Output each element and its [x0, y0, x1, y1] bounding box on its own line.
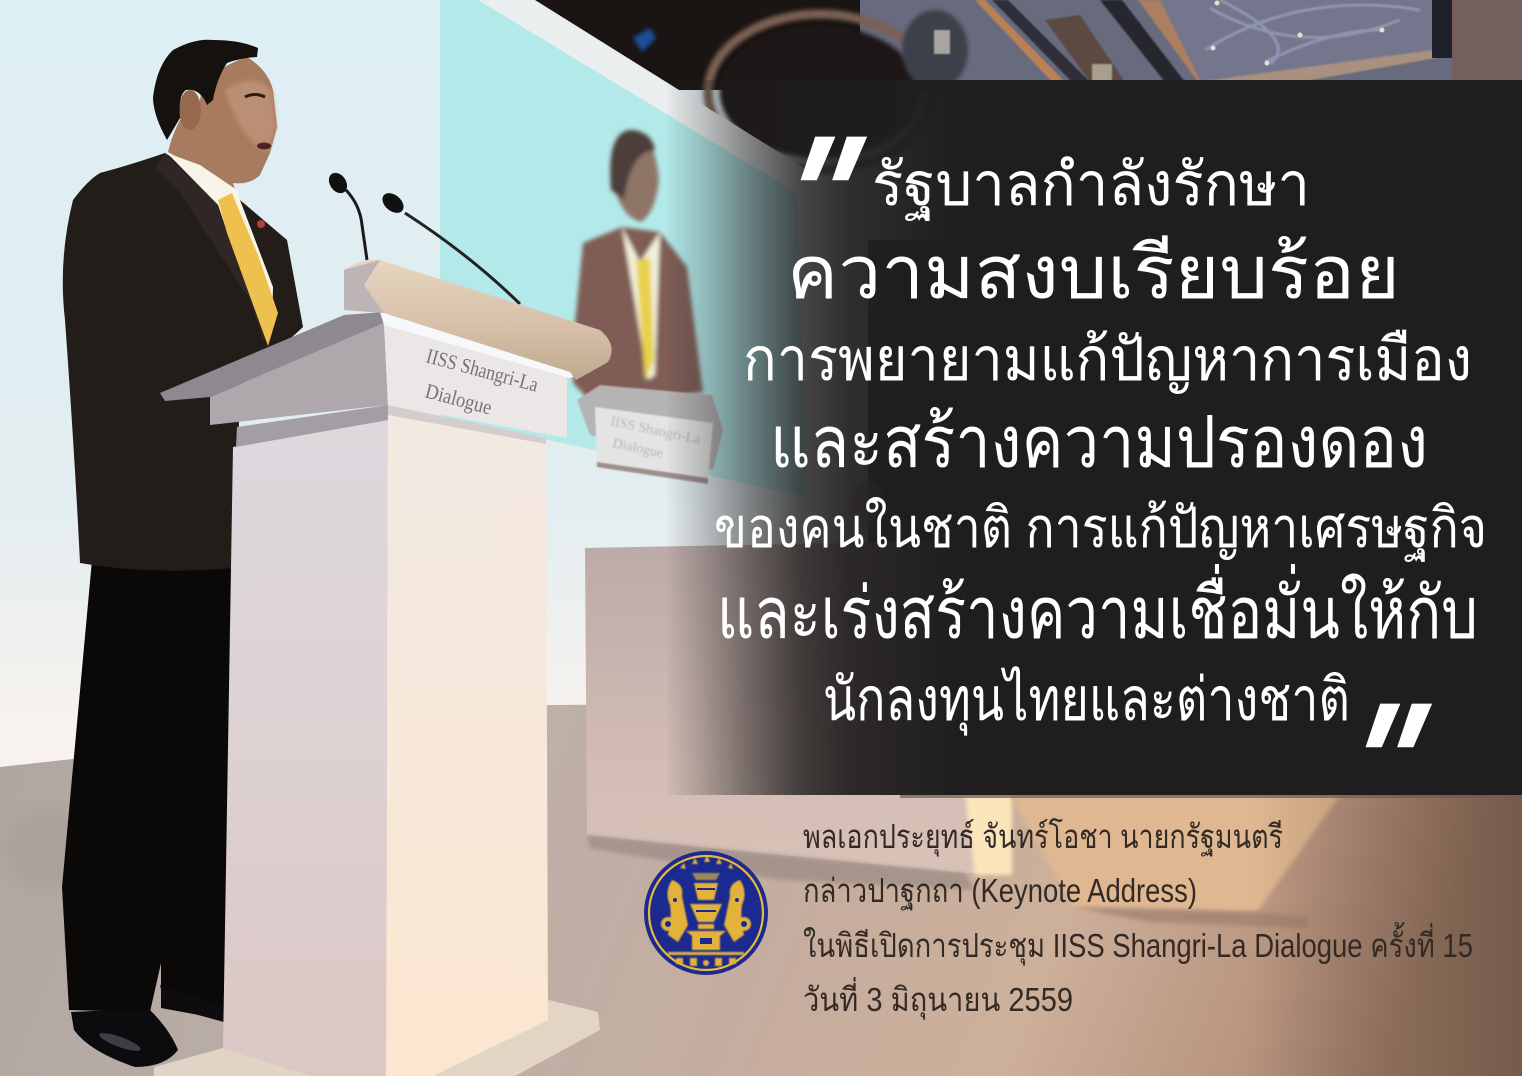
neck and face [168, 57, 277, 196]
top roll [344, 260, 612, 380]
warm lit floor patch [587, 795, 1522, 1076]
lectern label: Dialogue [423, 379, 495, 419]
ear [179, 90, 201, 130]
closing quotation mark: " [1325, 666, 1440, 862]
projection screen [440, 0, 807, 497]
reflection of lectern on screen: IISS Shangri-La [609, 414, 702, 448]
quote text [714, 151, 1487, 736]
mouth [257, 142, 271, 150]
icon: government seal [644, 851, 768, 975]
shelf [160, 312, 384, 401]
distant figure [850, 481, 886, 529]
quote text: ความสงบเรียบร้อย [787, 231, 1400, 314]
speaker credit text: วันที่ 3 มิถุนายน 2559 [803, 977, 1073, 1020]
lectern base [433, 1000, 600, 1076]
column right face [386, 405, 548, 1076]
reflection of speaker on screen [573, 130, 703, 412]
column shadow [236, 405, 388, 447]
speaker credit text: กล่าวปาฐกถา (Keynote Address) [803, 872, 1197, 911]
lapel [155, 153, 272, 340]
reflection of lectern on screen [577, 385, 723, 484]
lapel pin [257, 220, 265, 228]
lectern [154, 260, 612, 1076]
stage box behind lectern [585, 540, 1000, 873]
trousers [62, 560, 235, 1020]
quote text: การพยายามแก้ปัญหาการเมือง [743, 326, 1472, 394]
lectern head right face [384, 323, 567, 438]
speaker credit text [803, 818, 1473, 1020]
eye [245, 94, 265, 97]
front shoe [71, 1010, 178, 1067]
ceiling [535, 0, 1522, 170]
lectern label [423, 344, 542, 419]
speaker credit text: พลเอกประยุทธ์ จันทร์โอชา นายกรัฐมนตรี [803, 818, 1283, 857]
quote text: นักลงทุนไทยและต่างชาติ [823, 665, 1350, 736]
projection screen frame [440, 0, 875, 510]
navy banner on stage [868, 240, 1008, 545]
microphones [325, 169, 520, 304]
column left face [223, 420, 388, 1076]
hair [153, 40, 258, 140]
lectern head left face [210, 323, 388, 425]
opening quotation mark: " [760, 99, 875, 295]
quote text: รัฐบาลกำลังรักษา [872, 151, 1310, 221]
speaker [62, 40, 303, 1067]
floor [0, 700, 1522, 1076]
back shoe [160, 985, 224, 1022]
lectern label: IISS Shangri-La [424, 344, 542, 397]
shirt collar [167, 153, 273, 330]
necktie [218, 193, 278, 346]
reflection of lectern on screen: Dialogue [611, 436, 664, 462]
floor shadow [5, 810, 95, 890]
dark quote panel [668, 80, 1522, 798]
jacket [63, 153, 303, 571]
quote text: และสร้างความปรองดอง [770, 403, 1428, 483]
